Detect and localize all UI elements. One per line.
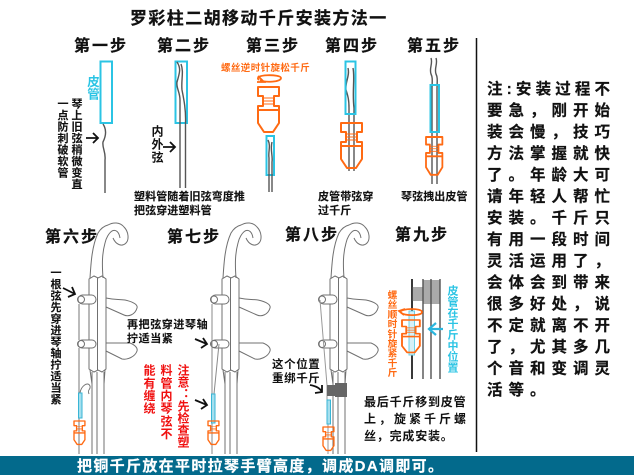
caption: 塑料管随着旧弦弯度推 bbox=[134, 189, 245, 203]
caption: 再把弦穿进琴轴 bbox=[127, 317, 208, 331]
side note: 安装。千斤只 bbox=[487, 209, 616, 227]
caption: 皮管带弦穿 bbox=[318, 189, 374, 203]
icon: tuner bbox=[74, 421, 85, 444]
caption line 2: 重绑千斤 bbox=[272, 371, 320, 385]
arrow bbox=[195, 399, 207, 409]
icon: tuner bbox=[426, 137, 442, 175]
old string bbox=[103, 124, 106, 193]
icon: tuner bbox=[208, 421, 219, 444]
heading: step 6: 第六步 bbox=[45, 227, 99, 246]
heading: step 4: 第四步 bbox=[325, 36, 379, 55]
label: tighten: 螺丝顺时针旋紧千斤 bbox=[386, 289, 397, 378]
red note col 2: 料管内琴弦不 bbox=[159, 363, 173, 440]
side note: 请年轻人帮忙 bbox=[487, 186, 616, 206]
caption: 最后千斤移到皮管 bbox=[364, 394, 466, 409]
strings bbox=[411, 279, 413, 379]
side note: 方法掌握就快 bbox=[487, 144, 616, 162]
wrapping bbox=[327, 383, 347, 397]
icon: leather tube bbox=[100, 62, 112, 123]
note right column: 琴上旧弦稍微变直 bbox=[70, 98, 82, 190]
caption line 2: 上，旋紧千斤螺 bbox=[364, 411, 469, 426]
side note: 个音和变调灵 bbox=[487, 358, 616, 378]
side note: 注:安装过程不 bbox=[487, 79, 610, 98]
side note: 了。年龄大可 bbox=[487, 165, 616, 184]
arrow bbox=[195, 338, 207, 348]
heading: step 3: 第三步 bbox=[246, 36, 300, 55]
icon: tuner bbox=[341, 123, 362, 168]
heading: step 1: 第一步 bbox=[74, 36, 128, 55]
icon: tuner bbox=[323, 427, 334, 450]
side note: 有用一段时间 bbox=[487, 230, 616, 248]
tube bbox=[78, 393, 82, 418]
tube bbox=[346, 62, 356, 114]
arrow bbox=[163, 142, 175, 152]
tube bbox=[327, 400, 330, 424]
strings bbox=[346, 68, 354, 171]
side note: 要急，刚开始 bbox=[487, 102, 616, 120]
step 2 bbox=[134, 36, 245, 217]
strings bbox=[212, 304, 219, 454]
caption line 3: 丝，完成安装。 bbox=[364, 428, 454, 443]
title: 罗彩柱二胡移动千斤安装方法一 bbox=[130, 8, 388, 28]
red note col 3: 注意：先检查塑 bbox=[176, 363, 190, 448]
label: position: 皮管在千斤中位置 bbox=[446, 284, 458, 373]
step 1 bbox=[56, 36, 128, 193]
strings bbox=[430, 58, 437, 184]
arrow bbox=[86, 133, 98, 143]
side note: 会体会到带来 bbox=[487, 272, 616, 292]
side note: 了，尤其多几 bbox=[487, 337, 616, 356]
bottom banner: 把铜千斤放在平时拉琴手臂高度，调成DA调即可。 bbox=[77, 457, 443, 475]
side note: 很多好处，说 bbox=[487, 294, 616, 313]
tube bbox=[430, 85, 439, 132]
caption: 这个位置 bbox=[272, 357, 320, 371]
caption line 2: 把弦穿进塑料管 bbox=[134, 203, 212, 217]
heading: step 8: 第八步 bbox=[285, 225, 339, 244]
step 8 bbox=[272, 223, 378, 454]
icon: tuner bbox=[402, 320, 420, 352]
strings bbox=[177, 62, 186, 188]
label vertical: 一根弦先穿进琴轴拧适当紧 bbox=[49, 267, 62, 405]
step 3 bbox=[221, 36, 310, 192]
bottom banner bbox=[0, 456, 634, 475]
icon: rotation arrow bbox=[257, 75, 281, 82]
side note: 活等。 bbox=[487, 380, 552, 399]
strings bbox=[320, 300, 328, 454]
side note: 不定就离不开 bbox=[487, 316, 616, 334]
heading: step 2: 第二步 bbox=[157, 36, 211, 55]
side note: 灵活运用了， bbox=[487, 252, 616, 270]
step 5 bbox=[401, 36, 468, 203]
heading: step 9: 第九步 bbox=[395, 225, 449, 244]
caption: 琴弦拽出皮管 bbox=[401, 189, 468, 203]
step 4 bbox=[318, 36, 379, 217]
heading: step 5: 第五步 bbox=[407, 36, 461, 55]
arrow bbox=[310, 385, 322, 393]
side note bbox=[487, 79, 616, 399]
icon: tube with strings bbox=[176, 62, 187, 123]
arrow bbox=[63, 287, 75, 297]
heading: step 7: 第七步 bbox=[167, 227, 221, 246]
tube bbox=[409, 311, 414, 355]
step 9 bbox=[364, 225, 469, 443]
step 6 bbox=[45, 223, 137, 454]
label: leather tube: 皮管 bbox=[85, 74, 99, 100]
label: loosen screw: 螺丝逆时针旋松千斤 bbox=[221, 62, 310, 74]
caption line 2: 拧适当紧 bbox=[127, 331, 173, 345]
strings bbox=[268, 140, 272, 192]
erhu bbox=[318, 223, 378, 454]
icon: tuner bbox=[258, 87, 279, 132]
red note col 1: 能有缠绕 bbox=[142, 363, 156, 415]
tube bbox=[266, 136, 274, 175]
strings right bbox=[423, 279, 440, 379]
divider bbox=[476, 38, 478, 452]
arrow: cyan bbox=[429, 323, 443, 335]
string and curl bbox=[79, 304, 90, 454]
note left column: 一点防刺破软管 bbox=[56, 98, 68, 179]
label: inner and outer strings: 内外弦 bbox=[150, 124, 164, 164]
erhu bbox=[78, 223, 137, 454]
caption line 2: 过千斤 bbox=[318, 203, 351, 217]
wrapping left bbox=[412, 281, 440, 303]
tube bbox=[212, 394, 215, 423]
step 7 bbox=[127, 223, 270, 454]
icon: rotation arrow bbox=[399, 309, 422, 315]
side note: 装会慢，技巧 bbox=[487, 122, 616, 141]
erhu bbox=[210, 223, 270, 454]
